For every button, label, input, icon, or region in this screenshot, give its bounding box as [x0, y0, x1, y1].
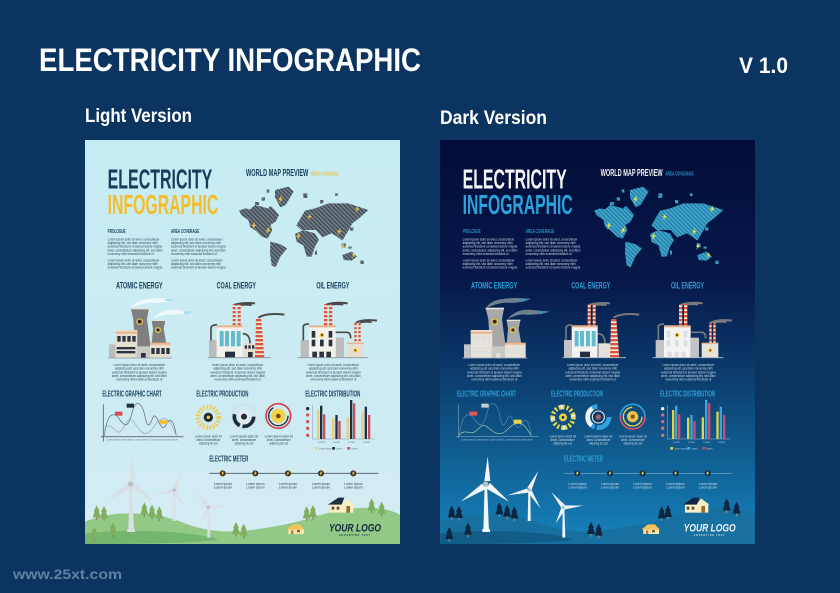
heading: world map preview: AREA COVERAGE	[311, 172, 339, 178]
chart: electric graphic chart: Lorem ipsum	[106, 439, 120, 442]
heading: dark version: Dark Version	[440, 108, 547, 129]
text block: prologue: Lorem ipsum dolor sit amet, consectetuer	[463, 237, 515, 241]
heading: world map preview: AREA COVERAGE	[665, 172, 694, 178]
text block: prologue: nonummy nibh euismod tincidunt ut	[463, 252, 509, 256]
chart: electric graphic chart	[101, 388, 183, 442]
section: atomic energy: ATOMIC ENERGY	[116, 280, 163, 290]
world map	[239, 187, 368, 267]
version label: V 1.0	[739, 53, 788, 78]
panel: light version	[85, 140, 400, 544]
heading: electricity infographic: ELECTRICITY	[463, 163, 567, 194]
timeline: electric meter: Lorem ipsum	[569, 485, 587, 489]
text block: area coverage: adipiscing elit, sed diam nonummy nibh	[526, 241, 576, 245]
section: oil energy: adipiscing elit, sed diam nonummy nibh	[664, 367, 713, 371]
section: atomic energy: euismod tincidunt ut laoreet dolore magna	[112, 370, 167, 374]
timeline: electric meter: ELECTRIC METER	[209, 453, 248, 463]
heading: electricity infographic	[108, 163, 218, 220]
timeline: electric meter: Lorem ipsum	[246, 485, 265, 489]
timeline: electric meter: Lorem ipsum	[344, 482, 363, 486]
chart: electric graphic chart: Lorem ipsum	[505, 439, 519, 442]
timeline: electric meter: ELECTRIC METER	[564, 453, 603, 463]
chart: electric graphic chart: Lorem ipsum	[475, 439, 489, 442]
chart: electric graphic chart: Lorem ipsum	[150, 439, 164, 442]
section: atomic energy: amet, consectetuer adipiscing elit, sed diam	[467, 374, 522, 378]
text block: prologue: PROLOGUE	[463, 229, 481, 235]
section: oil energy: nonummy nibh euismod tincidunt ut	[665, 377, 711, 381]
text block: area coverage: amet, consectetuer adipiscing elit, sed diam	[171, 248, 226, 252]
chart: electric production: adipiscing elit, sed	[624, 442, 643, 446]
chart: electric production: ELECTRIC PRODUCTION	[551, 388, 603, 398]
heading: world map preview: WORLD MAP PREVIEW	[601, 168, 663, 179]
chart: electric production: amet, consectetuer	[267, 438, 291, 442]
chart: electric production: amet, consectetuer	[232, 438, 256, 442]
section: oil energy: OIL ENERGY	[316, 280, 349, 290]
text block: prologue: adipiscing elit, sed diam nonummy nibh	[108, 262, 158, 266]
chart: electric production: amet, consectetuer	[551, 438, 575, 442]
heading: electricity infographic: INFOGRAPHIC	[108, 189, 218, 220]
section: coal energy: adipiscing elit, sed diam nonummy nibh	[568, 367, 617, 371]
text block: area coverage: adipiscing elit, sed diam nonummy nibh	[171, 241, 221, 245]
text block: area coverage: euismod tincidunt ut laoreet dolore magna	[526, 266, 580, 270]
text block: prologue: adipiscing elit, sed diam nonummy nibh	[463, 262, 513, 266]
watermark: www.25xt.com	[12, 566, 122, 582]
logo	[329, 523, 381, 537]
section: oil energy	[298, 280, 377, 381]
section: coal energy: euismod tincidunt ut laoreet dolore magna	[210, 370, 265, 374]
timeline: electric meter	[209, 453, 378, 489]
chart: electric distribution: Lorem	[703, 441, 710, 444]
section: atomic energy: amet, consectetuer adipiscing elit, sed diam	[112, 374, 167, 378]
section: atomic energy: nonummy nibh euismod tincidunt ut	[116, 377, 162, 381]
chart: electric distribution: Lorem	[348, 441, 355, 444]
timeline: electric meter: Lorem ipsum	[569, 482, 587, 486]
section: atomic energy: nonummy nibh euismod tincidunt ut	[471, 377, 517, 381]
panel: dark version	[440, 140, 755, 544]
section: coal energy: amet, consectetuer adipiscing elit, sed diam	[565, 374, 620, 378]
chart: electric distribution	[305, 388, 375, 450]
timeline: electric meter: Lorem ipsum	[601, 485, 619, 489]
text block: area coverage: Lorem ipsum dolor sit amet, consectetuer	[526, 258, 578, 262]
section: oil energy: Lorem ipsum dolor sit amet, consectetuer	[662, 363, 715, 367]
timeline: electric meter: Lorem ipsum	[246, 482, 265, 486]
text block: area coverage: Lorem ipsum dolor sit amet, consectetuer	[526, 237, 578, 241]
section: coal energy: COAL ENERGY	[571, 280, 610, 290]
text block: prologue: Lorem ipsum dolor sit amet, consectetuer	[463, 258, 515, 262]
chart: electric graphic chart: Lorem ipsum	[461, 439, 475, 442]
text block: area coverage: AREA COVERAGE	[171, 229, 200, 235]
section: atomic energy: Lorem ipsum dolor sit amet, consectetuer	[113, 363, 166, 367]
section: oil energy: euismod tincidunt ut laoreet dolore magna	[661, 370, 716, 374]
timeline: electric meter: Lorem ipsum	[279, 485, 297, 489]
section: atomic energy	[108, 280, 195, 381]
timeline: electric meter: Lorem ipsum	[667, 482, 685, 486]
section: atomic energy: ATOMIC ENERGY	[471, 280, 517, 290]
chart: electric distribution: Lorem	[718, 441, 725, 444]
logo: YOUR LOGO	[684, 523, 736, 535]
logo: ADVERTISE TEXT	[694, 534, 725, 537]
logo	[684, 523, 736, 537]
timeline: electric meter: Lorem ipsum	[214, 482, 232, 486]
chart: electric distribution: ELECTRIC DISTRIBUTION	[660, 388, 715, 398]
text block: area coverage: euismod tincidunt ut laoreet dolore magna	[171, 266, 226, 270]
chart: electric production: Lorem ipsum dolor sit	[549, 435, 576, 439]
chart: electric distribution: Lorem	[336, 447, 343, 450]
chart: electric production: ELECTRIC PRODUCTION	[196, 388, 248, 398]
text block: area coverage	[171, 229, 226, 270]
timeline: electric meter: Lorem ipsum	[634, 485, 652, 489]
chart: electric production: Lorem ipsum dolor sit	[230, 435, 258, 439]
section: atomic energy: adipiscing elit, sed diam nonummy nibh	[115, 367, 164, 371]
chart: electric distribution: Lorem	[351, 447, 358, 450]
chart: electric graphic chart: Lorem ipsum	[120, 439, 134, 442]
text block: prologue: euismod tincidunt ut laoreet dolore magna	[108, 266, 162, 270]
chart: electric production: Lorem ipsum dolor sit	[584, 435, 612, 439]
chart: electric distribution: Lorem	[318, 441, 325, 444]
world map	[594, 187, 723, 267]
chart: electric distribution: ELECTRIC DISTRIBUTION	[305, 388, 360, 398]
chart: electric graphic chart: Lorem ipsum	[490, 439, 504, 442]
section: atomic energy: Lorem ipsum dolor sit amet, consectetuer	[468, 363, 521, 367]
chart: electric production	[195, 388, 293, 446]
chart: electric distribution: Lorem	[363, 441, 370, 444]
landscape: hills, turbines, trees, houses	[85, 456, 400, 544]
text block: prologue: amet, consectetuer adipiscing elit, sed diam	[108, 248, 163, 252]
section: oil energy: amet, consectetuer adipiscing elit, sed diam	[306, 374, 361, 378]
text block: area coverage: AREA COVERAGE	[526, 229, 554, 235]
section: oil energy: OIL ENERGY	[671, 280, 704, 290]
chart: electric distribution: Lorem	[673, 441, 680, 444]
main title: ELECTRICITY INFOGRAPHIC	[39, 42, 421, 78]
landscape: hills, turbines, trees, houses	[440, 456, 755, 544]
text block: area coverage: euismod tincidunt ut laoreet dolore magna	[171, 245, 226, 249]
section: oil energy: nonummy nibh euismod tincidunt ut	[310, 377, 356, 381]
chart: electric graphic chart: Lorem ipsum	[519, 439, 533, 442]
section: coal energy: Lorem ipsum dolor sit amet, consectetuer	[212, 363, 264, 367]
chart: electric graphic chart: ELECTRIC GRAPHIC CHART	[457, 388, 516, 398]
chart: electric production: adipiscing elit, sed	[553, 442, 572, 446]
text block: prologue	[108, 229, 163, 270]
text block: prologue: adipiscing elit, sed diam nonummy nibh	[463, 241, 513, 245]
chart: electric production: adipiscing elit, sed	[269, 442, 288, 446]
timeline: electric meter: Lorem ipsum	[214, 485, 232, 489]
text block: prologue: euismod tincidunt ut laoreet dolore magna	[463, 245, 517, 249]
timeline: electric meter: Lorem ipsum	[667, 485, 685, 489]
text block: prologue: Lorem ipsum dolor sit amet, consectetuer	[108, 258, 160, 262]
text block: area coverage	[526, 229, 581, 270]
section: coal energy: COAL ENERGY	[217, 280, 256, 290]
heading: electricity infographic	[463, 163, 573, 220]
heading: electricity infographic: INFOGRAPHIC	[463, 189, 573, 220]
section: oil energy: Lorem ipsum dolor sit amet, consectetuer	[307, 363, 360, 367]
section: oil energy: adipiscing elit, sed diam nonummy nibh	[309, 367, 358, 371]
heading: world map preview: WORLD MAP PREVIEW	[246, 168, 309, 179]
text block: prologue: adipiscing elit, sed diam nonummy nibh	[108, 241, 158, 245]
chart: electric graphic chart: ELECTRIC GRAPHIC CHART	[102, 388, 162, 398]
chart: electric distribution: Lorem	[688, 441, 695, 444]
text block: prologue: euismod tincidunt ut laoreet dolore magna	[463, 266, 517, 270]
chart: electric production: Lorem ipsum dolor sit	[265, 435, 293, 439]
text block: area coverage: nonummy nibh euismod tincidunt ut	[171, 252, 217, 256]
text block: area coverage: euismod tincidunt ut laoreet dolore magna	[526, 245, 580, 249]
chart: electric production: Lorem ipsum dolor sit	[619, 435, 647, 439]
section: coal energy: nonummy nibh euismod tincidunt ut	[215, 377, 261, 381]
text block: area coverage: adipiscing elit, sed diam nonummy nibh	[526, 262, 576, 266]
section: atomic energy: euismod tincidunt ut laoreet dolore magna	[467, 370, 522, 374]
text block: prologue: amet, consectetuer adipiscing elit, sed diam	[463, 248, 518, 252]
text block: prologue	[463, 229, 518, 270]
logo: ADVERTISE TEXT	[339, 534, 371, 537]
section: oil energy: euismod tincidunt ut laoreet dolore magna	[306, 370, 361, 374]
text block: prologue: PROLOGUE	[108, 229, 126, 235]
section: atomic energy: adipiscing elit, sed diam nonummy nibh	[470, 367, 519, 371]
chart: electric graphic chart: Lorem ipsum	[164, 439, 178, 442]
timeline: electric meter: Lorem ipsum	[312, 482, 330, 486]
section: coal energy	[563, 280, 639, 381]
chart: electric graphic chart: Lorem ipsum	[135, 439, 149, 442]
text block: area coverage: Lorem ipsum dolor sit amet, consectetuer	[171, 258, 223, 262]
text block: area coverage: amet, consectetuer adipiscing elit, sed diam	[526, 248, 581, 252]
chart: electric distribution: Lorem ipsum	[674, 447, 688, 450]
chart: electric production: amet, consectetuer	[196, 438, 220, 442]
chart: electric distribution: Lorem	[333, 441, 340, 444]
timeline: electric meter: Lorem ipsum	[279, 482, 297, 486]
text block: area coverage: adipiscing elit, sed diam nonummy nibh	[171, 262, 221, 266]
chart: electric distribution	[660, 388, 730, 450]
text block: prologue: Lorem ipsum dolor sit amet, consectetuer	[108, 237, 160, 241]
chart: electric distribution: Lorem	[691, 447, 698, 450]
chart: electric distribution: Lorem	[706, 447, 713, 450]
chart: electric production: amet, consectetuer	[621, 438, 645, 442]
text block: area coverage: Lorem ipsum dolor sit amet, consectetuer	[171, 237, 223, 241]
timeline: electric meter: Lorem ipsum	[312, 485, 330, 489]
section: coal energy: amet, consectetuer adipiscing elit, sed diam	[210, 374, 265, 378]
chart: electric production: adipiscing elit, sed	[199, 442, 218, 446]
chart: electric distribution: Lorem ipsum	[319, 447, 333, 450]
text block: prologue: euismod tincidunt ut laoreet dolore magna	[108, 245, 162, 249]
chart: electric production: amet, consectetuer	[586, 438, 610, 442]
section: coal energy: euismod tincidunt ut laoreet dolore magna	[565, 370, 620, 374]
timeline: electric meter: Lorem ipsum	[344, 485, 363, 489]
text block: prologue: nonummy nibh euismod tincidunt ut	[108, 252, 154, 256]
logo: YOUR LOGO	[329, 523, 381, 535]
timeline: electric meter: Lorem ipsum	[601, 482, 619, 486]
section: coal energy: nonummy nibh euismod tincidunt ut	[570, 377, 616, 381]
timeline: electric meter	[564, 453, 732, 489]
timeline: electric meter: Lorem ipsum	[699, 482, 717, 486]
timeline: electric meter: Lorem ipsum	[699, 485, 717, 489]
chart: electric production: adipiscing elit, sed	[235, 442, 254, 446]
chart: electric graphic chart	[456, 388, 538, 442]
section: atomic energy	[463, 280, 550, 381]
section: coal energy: adipiscing elit, sed diam nonummy nibh	[213, 367, 262, 371]
timeline: electric meter: Lorem ipsum	[634, 482, 652, 486]
section: coal energy: Lorem ipsum dolor sit amet, consectetuer	[567, 363, 619, 367]
text block: area coverage: nonummy nibh euismod tincidunt ut	[526, 252, 572, 256]
chart: electric production: adipiscing elit, sed	[589, 442, 608, 446]
heading: light version: Light Version	[85, 106, 192, 127]
section: oil energy	[653, 280, 732, 381]
chart: electric production	[549, 388, 647, 446]
chart: electric production: Lorem ipsum dolor sit	[195, 435, 222, 439]
heading: electricity infographic: ELECTRICITY	[108, 163, 212, 194]
section: oil energy: amet, consectetuer adipiscing elit, sed diam	[661, 374, 716, 378]
section: coal energy	[208, 280, 284, 381]
